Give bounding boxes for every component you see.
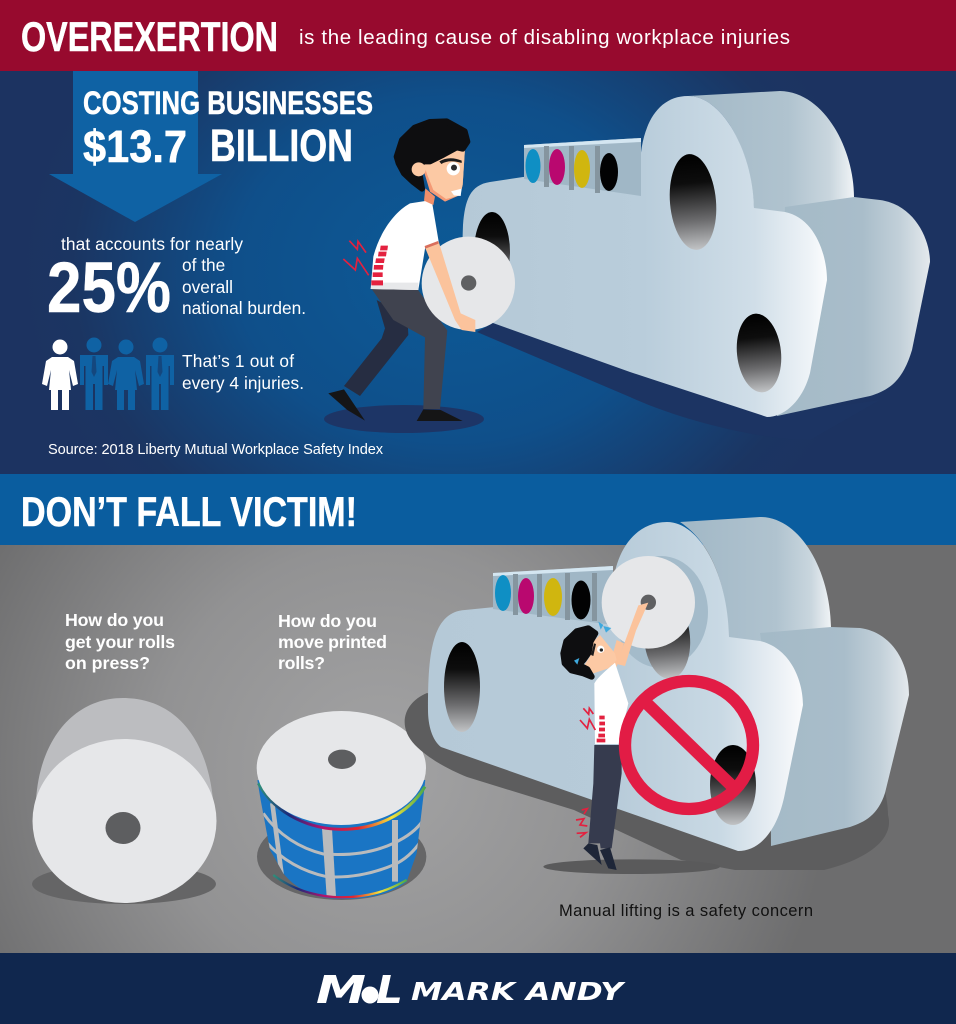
cost heading: [83, 85, 373, 172]
curly hair: [563, 628, 595, 677]
text: accounts for nearly: that accounts for nearly: [61, 234, 243, 254]
text: one out of four: [182, 351, 304, 393]
logo: mark andy: L: [376, 968, 403, 1012]
stat: 25 percent: 25%: [47, 249, 171, 328]
text: national burden: [182, 255, 306, 318]
question: rolls on press: [65, 610, 175, 673]
text: one out of four: every 4 injuries.: [182, 373, 304, 393]
pain marks: [343, 241, 369, 275]
panel: don't fall victim: [0, 517, 956, 953]
question: move printed rolls: rolls?: [278, 653, 325, 673]
text: national burden: national burden.: [182, 298, 306, 318]
curly hair: [397, 121, 467, 189]
icon: one in four people: [42, 338, 174, 410]
icon: blank paper roll: [32, 698, 216, 904]
text: national burden: overall: [182, 277, 233, 297]
figure: man lifting roll: [324, 121, 515, 433]
text: one out of four: That’s 1 out of: [182, 351, 294, 371]
question: rolls on press: on press?: [65, 653, 150, 673]
text: national burden: of the: [182, 255, 225, 275]
logo: mark andy: M: [316, 968, 366, 1012]
footer band: [0, 953, 956, 1024]
ink stations: [524, 138, 641, 196]
question: move printed rolls: How do you: [278, 611, 377, 631]
ink stations: [493, 566, 613, 625]
header band: [0, 0, 956, 71]
icon: printed label roll: [253, 711, 430, 900]
pain marks: [576, 708, 595, 837]
panel: overexertion cost: [0, 71, 956, 474]
roll overhead: [602, 556, 695, 649]
cost heading: $13.7: [83, 121, 187, 172]
question: rolls on press: How do you: [65, 610, 164, 630]
heading: don't fall victim: DON’T FALL VICTIM!: [21, 488, 357, 535]
question: move printed rolls: move printed: [278, 632, 387, 652]
band: don't fall victim: [0, 474, 956, 545]
logo: mark andy: [316, 968, 627, 1012]
source note: Source: 2018 Liberty Mutual Workplace Safety Index: [48, 442, 384, 458]
machine: printing press, lower: [405, 517, 909, 870]
icon: prohibition sign: [625, 681, 753, 809]
logo: mark andy: MARK ANDY: [411, 977, 627, 1006]
cost heading: BILLION: [210, 120, 353, 171]
machine: printing press, upper: [462, 91, 930, 440]
question: rolls on press: get your rolls: [65, 632, 175, 652]
cost heading: COSTING BUSINESSES: [83, 85, 373, 121]
figure: man reaching up with roll: [543, 556, 720, 874]
arrow: downward cost arrow: [49, 71, 222, 222]
header subtitle: is the leading cause of disabling workplace injuries: [299, 26, 790, 49]
caption: safety concern: Manual lifting is a safety concern: [559, 902, 813, 920]
roll carried: [422, 237, 515, 330]
question: move printed rolls: [278, 611, 387, 673]
heading: overexertion: OVEREXERTION: [21, 13, 278, 60]
